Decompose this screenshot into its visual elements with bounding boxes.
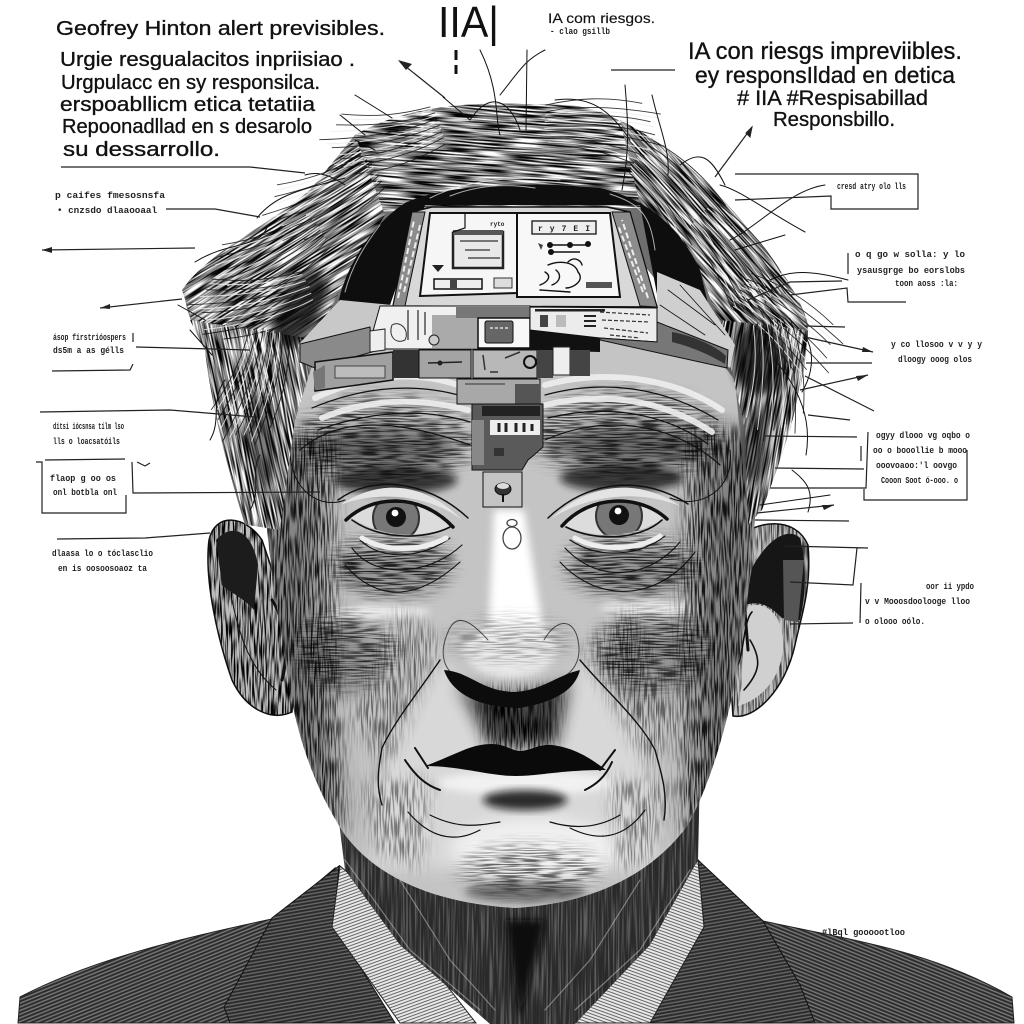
title left: Geofrey Hinton alert previsibles. bbox=[56, 18, 385, 40]
right eye bbox=[548, 485, 695, 591]
left annotations: • cnzsdo dlaaooaal bbox=[57, 206, 158, 216]
right callout lines and boxes bbox=[715, 127, 967, 624]
neck bbox=[340, 802, 700, 1024]
forehead skin beside device bbox=[298, 272, 735, 368]
body text left: Urgie resgualacitos inpriisiao . bbox=[60, 49, 355, 71]
left annotations: lls o loacsatóils bbox=[53, 437, 120, 447]
vertical hatching bbox=[266, 418, 755, 876]
suit jacket bbox=[18, 860, 1014, 1023]
hair shadows bbox=[242, 264, 788, 486]
left ear bbox=[207, 519, 293, 716]
right annotations: #lBql goooootloo bbox=[822, 928, 905, 938]
right lapel bbox=[650, 860, 815, 1023]
body text left: Repoonadllad en s desarolo bbox=[62, 116, 312, 138]
vertical module bbox=[472, 404, 543, 470]
device embedded in forehead bbox=[300, 207, 728, 507]
right ear bbox=[731, 523, 810, 718]
title right: IA con riesgs impreviibles. bbox=[688, 38, 962, 65]
hair mass bbox=[185, 103, 808, 525]
lower block bbox=[457, 379, 540, 404]
strands over shadow bbox=[345, 178, 655, 292]
right annotations: oor ii ypdo bbox=[926, 582, 974, 592]
body text left bbox=[60, 49, 355, 161]
right annotations: cresd atry olo lls bbox=[837, 182, 906, 192]
right annotations: v v Mooosdoolooge lloo bbox=[865, 597, 970, 607]
hair bbox=[178, 50, 848, 530]
title right: ey responsIldad en detica bbox=[695, 62, 955, 88]
left annotations: dlaasa lo o tóclasclio bbox=[52, 549, 153, 559]
far right band bbox=[600, 322, 728, 368]
right annotations: ysausgrge bo eorslobs bbox=[857, 266, 965, 276]
stray hairs bbox=[178, 50, 848, 512]
small sensor box bbox=[483, 472, 522, 507]
right annotations: Cooon Soot ó-ooo. o bbox=[881, 476, 958, 486]
left callout lines and arrows bbox=[36, 60, 675, 539]
right annotations: toon aoss :la: bbox=[895, 279, 958, 289]
right annotations: oo o booollie b mooo bbox=[873, 446, 967, 456]
left annotations: p caifes fmesosnsfa bbox=[55, 191, 166, 201]
upper left strip bbox=[368, 306, 530, 349]
hair streak texture bbox=[182, 104, 808, 530]
right screen: r y 7 E I bbox=[538, 225, 590, 234]
left annotations: ásop fírstrióospers bbox=[53, 333, 126, 343]
right annotations: o q go w solla: y lo bbox=[855, 250, 965, 260]
right annotations: ooovoaoo:'l oovgo bbox=[876, 461, 957, 471]
left annotations bbox=[50, 191, 166, 574]
body text left: Urgpulacc en sy responsilca. bbox=[61, 72, 320, 94]
body text left: su dessarrollo. bbox=[63, 139, 220, 161]
body text left: erspoabllicm etica tetatiia bbox=[60, 94, 316, 116]
left annotations: flaop g oo os bbox=[50, 474, 116, 484]
right screen bbox=[517, 213, 620, 297]
chip window bbox=[478, 318, 530, 348]
forehead wrinkles bbox=[290, 376, 730, 503]
center row bbox=[393, 347, 590, 378]
small top caption: - clao gsillb bbox=[550, 27, 610, 37]
skin base bbox=[250, 330, 770, 920]
left shoulder bbox=[18, 868, 335, 1023]
right shoulder bbox=[698, 862, 1014, 1023]
right annotations: y co llosoo v v y y bbox=[891, 340, 983, 350]
upper right strip bbox=[530, 307, 657, 352]
left band bbox=[300, 327, 393, 391]
left lapel bbox=[224, 866, 395, 1023]
title right: Responsbillo. bbox=[773, 109, 895, 131]
left eye bbox=[338, 484, 468, 592]
left annotations: ditsi iócsnsa tílm lso bbox=[53, 422, 124, 432]
face bbox=[250, 330, 770, 920]
horizontal hatching bbox=[288, 381, 728, 904]
center title IIA bbox=[438, 0, 499, 74]
left annotations: en is oosoosoaoz ta bbox=[58, 564, 148, 574]
right annotations bbox=[822, 182, 983, 938]
small top caption bbox=[548, 10, 655, 37]
black shadow under hair bbox=[338, 184, 712, 320]
right annotations: dloogy ooog olos bbox=[898, 355, 972, 365]
title left bbox=[56, 18, 385, 161]
hair tufts bbox=[185, 90, 854, 453]
shirt collar bbox=[332, 860, 704, 1023]
left annotations: onl botbla onl bbox=[53, 488, 117, 498]
left screen: ryto bbox=[490, 221, 505, 228]
mouth bbox=[405, 744, 645, 837]
right annotations: ogyy dlooo vg oqbo o bbox=[876, 431, 970, 441]
title right bbox=[688, 38, 962, 131]
outer bezel bbox=[393, 207, 657, 307]
left screen bbox=[420, 213, 517, 296]
nose bbox=[378, 520, 665, 820]
title right: # IIA #Respisabillad bbox=[737, 87, 928, 110]
small top caption: IA com riesgos. bbox=[548, 10, 655, 26]
tonal shading bbox=[262, 426, 770, 902]
left annotations: ds5m a as gélls bbox=[53, 346, 124, 356]
right annotations: o olooo oólo. bbox=[865, 617, 925, 627]
